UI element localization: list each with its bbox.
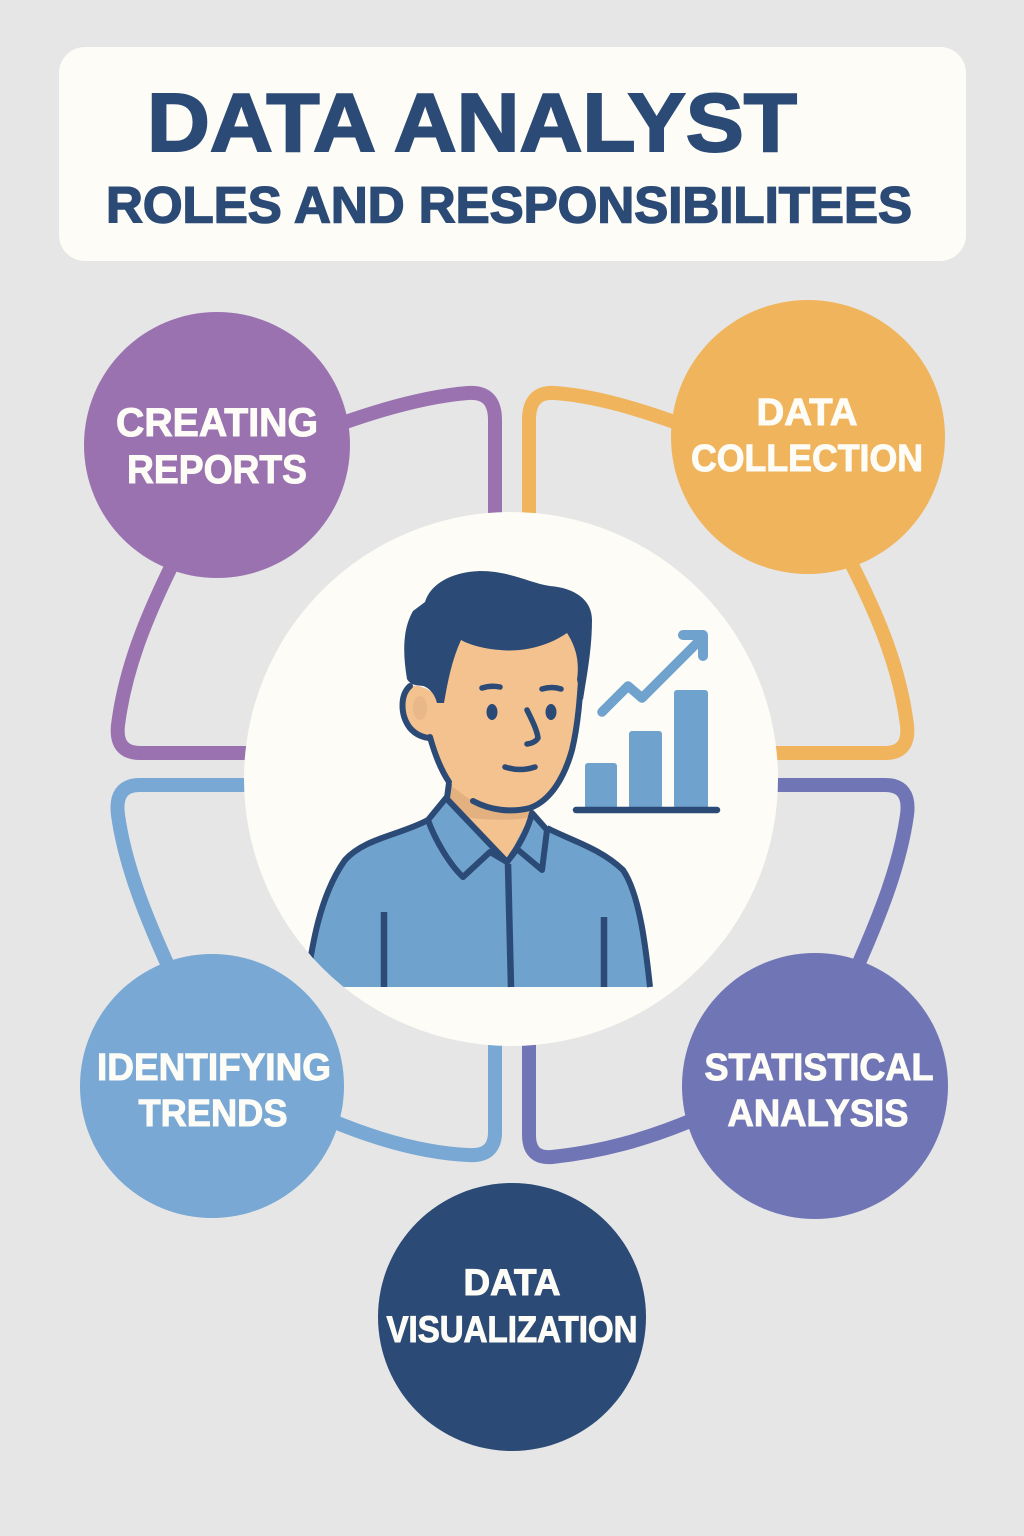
circle: data visualization: DATA	[464, 1262, 560, 1303]
circle: data collection: COLLECTION	[691, 438, 923, 480]
central circle	[244, 512, 778, 1046]
title heading: DATA ANALYST	[147, 76, 797, 169]
connector: identifying trends	[117, 785, 495, 1155]
eyes	[486, 704, 556, 720]
title panel	[59, 47, 966, 261]
circle: statistical analysis: STATISTICAL	[704, 1047, 934, 1089]
circle: creating reports: CREATING	[116, 401, 318, 445]
circle: identifying trends: IDENTIFYING	[97, 1047, 331, 1089]
connector: statistical analysis	[529, 785, 908, 1157]
circle: identifying trends	[80, 954, 344, 1218]
icon: growth bar chart	[576, 635, 717, 810]
circle: data visualization	[378, 1183, 646, 1451]
shirt seams	[384, 864, 604, 987]
circle: identifying trends: TRENDS	[138, 1093, 288, 1135]
subtitle heading: ROLES AND RESPONSIBILITEES	[106, 176, 912, 234]
neck	[444, 783, 530, 858]
ear	[400, 683, 430, 741]
circle: statistical analysis: ANALYSIS	[728, 1093, 908, 1135]
circle: data collection: DATA	[756, 392, 858, 434]
shirt	[306, 820, 650, 987]
circle: data visualization: VISUALIZATION	[386, 1309, 638, 1350]
connector: creating reports	[118, 393, 495, 753]
connector: data collection	[529, 393, 907, 753]
hair	[404, 571, 592, 703]
circle: creating reports: REPORTS	[127, 448, 307, 492]
circle: data collection	[671, 300, 945, 574]
circle: statistical analysis	[682, 953, 948, 1219]
illustration: analyst figure	[306, 571, 650, 987]
collar	[428, 798, 547, 877]
face	[430, 625, 583, 811]
brows, nose, mouth	[482, 686, 561, 770]
circle: creating reports	[84, 312, 350, 578]
